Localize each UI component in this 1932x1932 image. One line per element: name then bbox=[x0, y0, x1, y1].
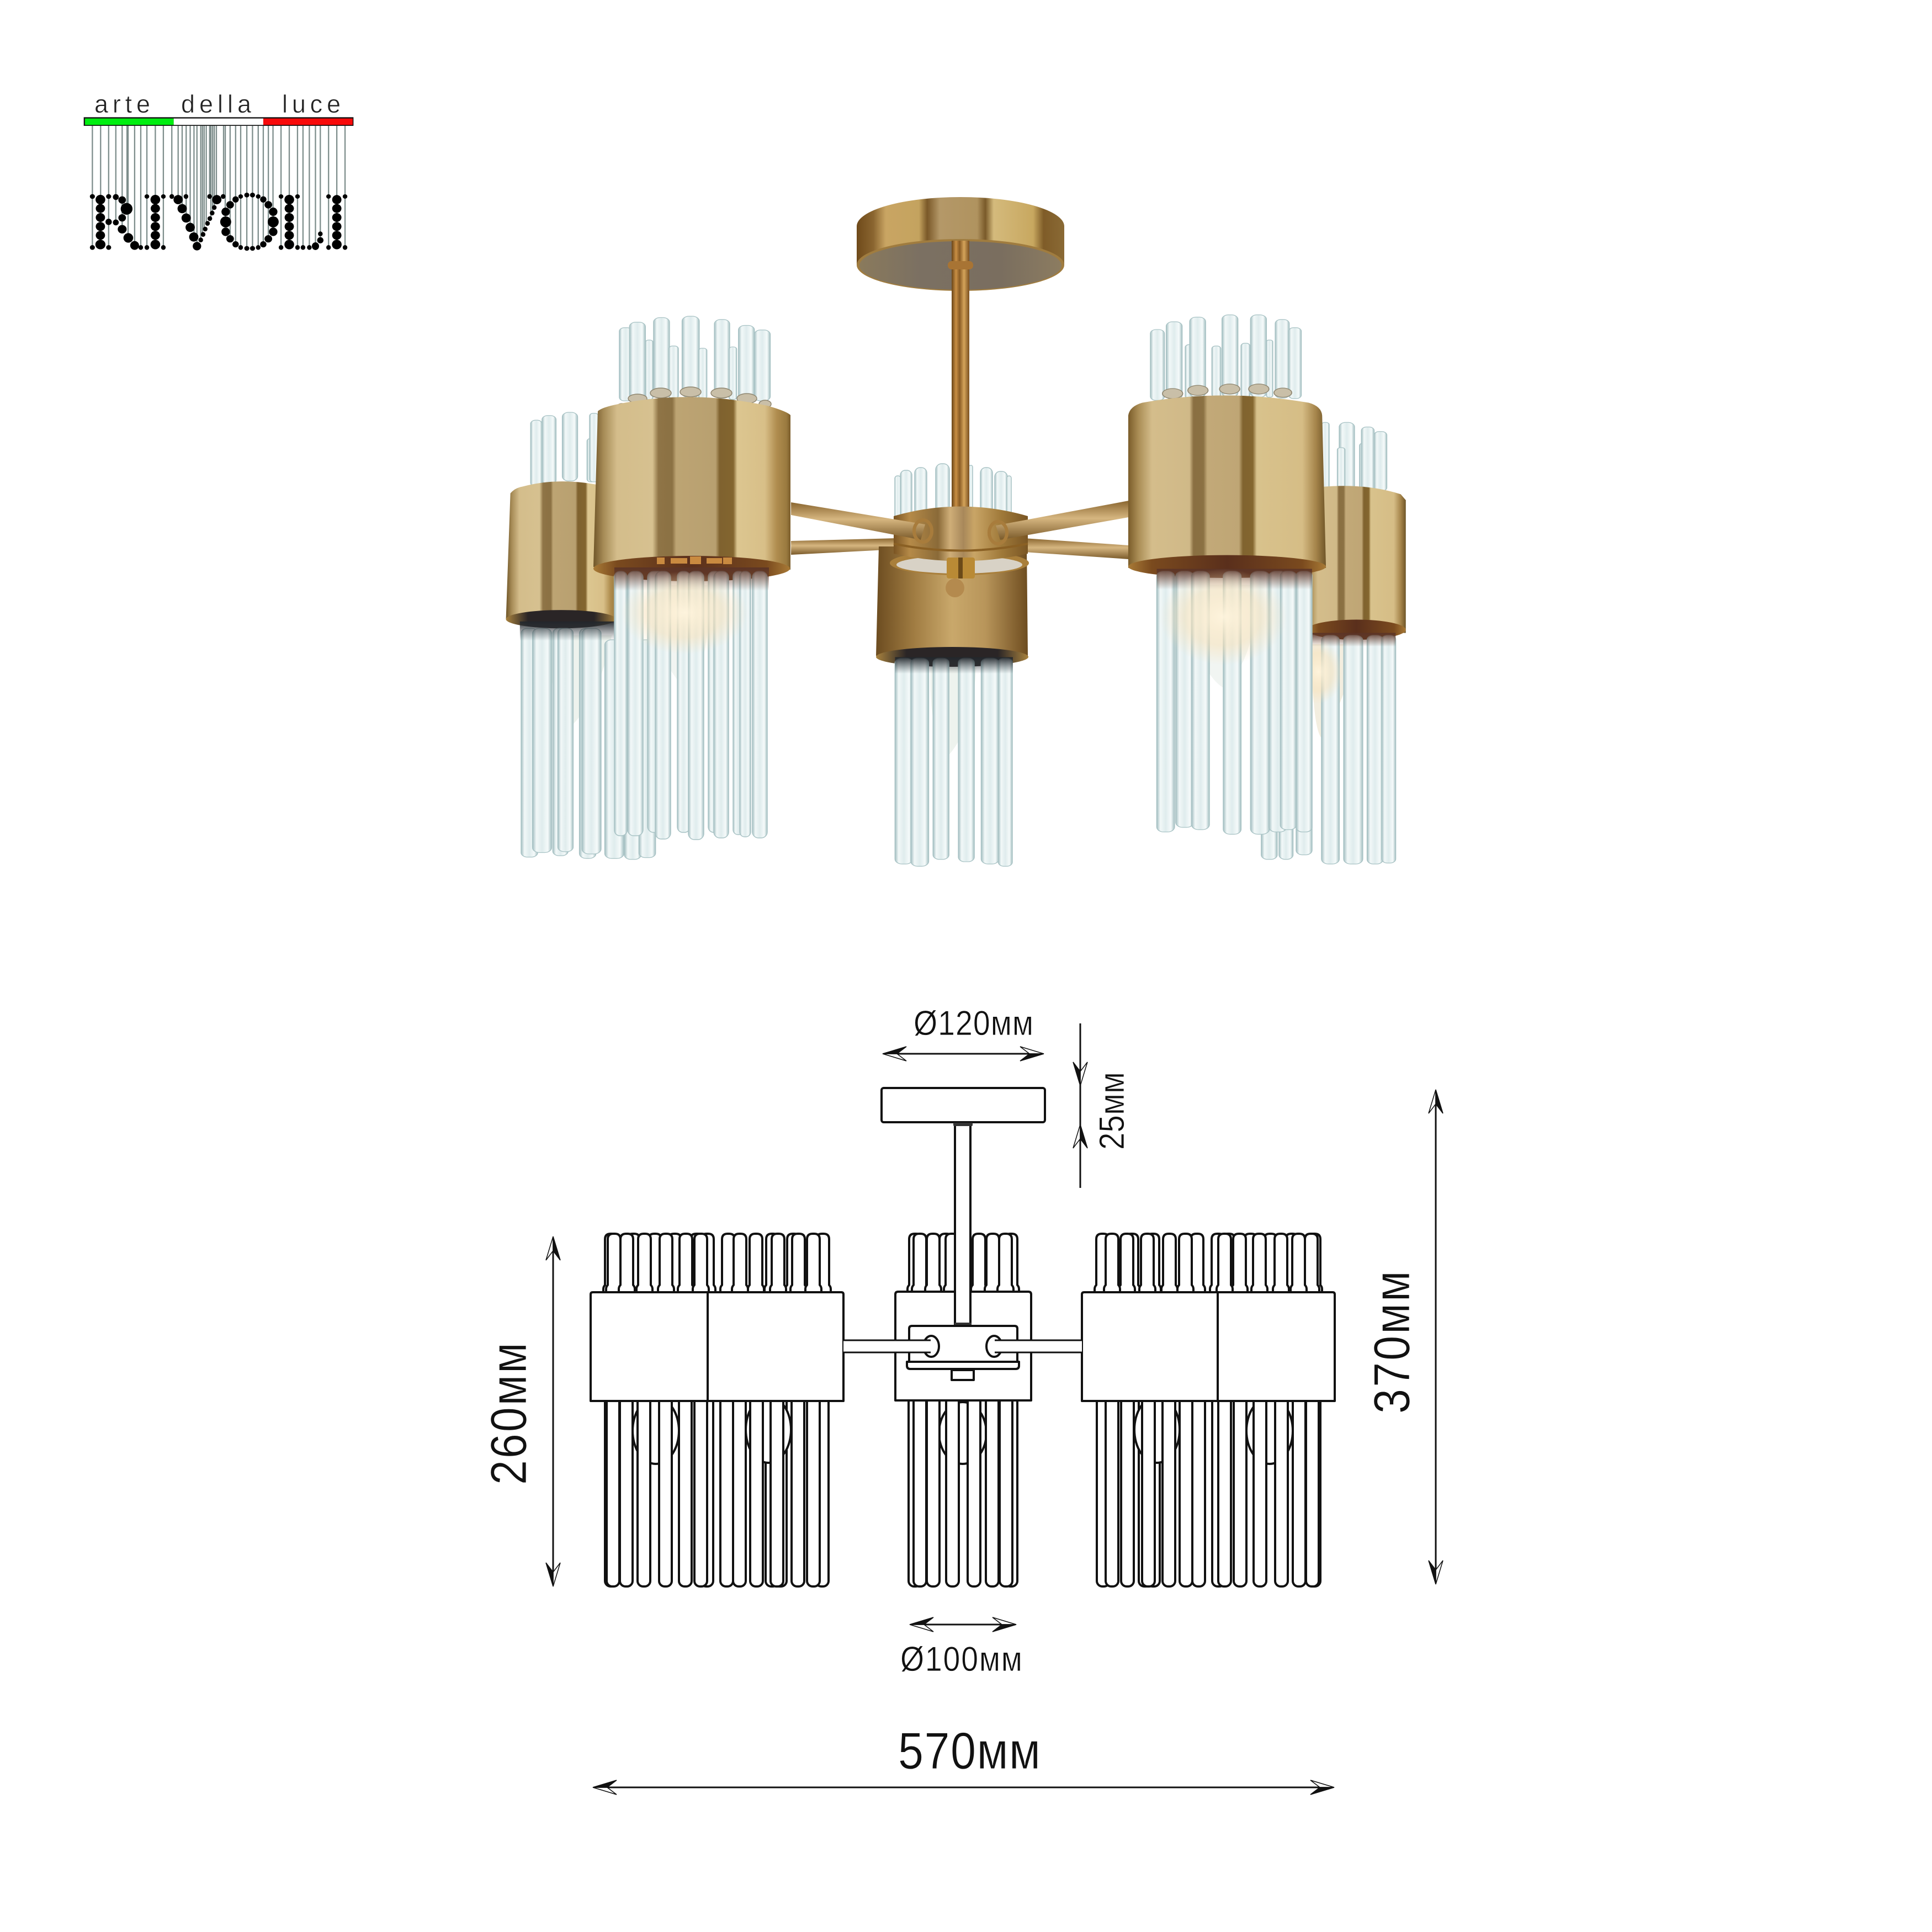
logo wordmark artwork bbox=[84, 117, 353, 251]
letter R beads bbox=[90, 194, 143, 250]
right small lamp bbox=[1261, 422, 1406, 864]
dimension: shade diameter 100 mm: Ø100мм bbox=[900, 1639, 1022, 1679]
central lamp shade outline bbox=[895, 1292, 1031, 1400]
logo: Rivoli arte della luce bbox=[84, 90, 353, 251]
letter V beads bbox=[169, 194, 225, 251]
dimension: shade diameter 100 mm bbox=[900, 1617, 1022, 1679]
letter L beads bbox=[279, 194, 323, 250]
letter O beads bbox=[220, 193, 279, 251]
product illustration: brass chandelier bbox=[506, 197, 1406, 866]
dimension: canopy height 25 mm: 25мм bbox=[1092, 1072, 1132, 1150]
lower arms bbox=[791, 538, 1129, 559]
right lamp pair mirrored bbox=[986, 1234, 1335, 1586]
central lamp rods bbox=[907, 1234, 1019, 1586]
dimension: canopy diameter 120 mm bbox=[883, 1004, 1044, 1061]
technical line drawing bbox=[591, 1088, 1335, 1586]
logo tagline bbox=[94, 90, 341, 118]
logo tagline: arte bbox=[94, 90, 150, 118]
tricolour bar bbox=[84, 117, 353, 126]
bulbs bbox=[633, 1397, 791, 1464]
arm with socket bbox=[843, 1336, 939, 1357]
lower front rods bbox=[607, 1397, 820, 1586]
upper rods bbox=[603, 1234, 831, 1292]
double shade boxes bbox=[591, 1292, 843, 1401]
dimension: overall width 570 mm: 570мм bbox=[898, 1722, 1041, 1780]
dimension: canopy diameter 120 mm: Ø120мм bbox=[914, 1004, 1033, 1043]
dimension: canopy height 25 mm bbox=[1073, 1023, 1132, 1188]
left large lamp shade bbox=[593, 387, 790, 581]
dimension: lamp height 260 mm: 260мм bbox=[481, 1342, 537, 1485]
lower back rods bbox=[605, 1397, 829, 1586]
dimension: lamp height 260 mm bbox=[481, 1236, 560, 1586]
left large lamp lower rods bbox=[614, 567, 769, 840]
dimension: overall height 370 mm bbox=[1364, 1090, 1443, 1584]
last letter I beads bbox=[326, 194, 347, 250]
dimension: overall width 570 mm bbox=[593, 1722, 1334, 1795]
central hub outline bbox=[907, 1326, 1019, 1380]
central hub bbox=[890, 507, 1029, 597]
stem bbox=[953, 1123, 973, 1326]
dimension: overall height 370 mm: 370мм bbox=[1364, 1271, 1420, 1414]
canopy outline bbox=[882, 1088, 1045, 1122]
upper arms bbox=[791, 501, 1129, 544]
stem bbox=[948, 241, 973, 511]
letter I beads bbox=[145, 194, 166, 250]
logo tagline: luce bbox=[282, 90, 341, 118]
ceiling canopy bbox=[857, 197, 1064, 291]
hanging threads bbox=[92, 126, 345, 248]
left small lamp bbox=[506, 412, 656, 859]
left large lamp upper rods bbox=[619, 316, 770, 401]
central lamp shade and lower rods bbox=[876, 546, 1028, 866]
left lamp pair and arm outline bbox=[591, 1234, 939, 1586]
right large lamp bbox=[1128, 315, 1326, 834]
logo tagline: della bbox=[181, 90, 252, 118]
central lamp upper rods bbox=[895, 464, 1011, 526]
